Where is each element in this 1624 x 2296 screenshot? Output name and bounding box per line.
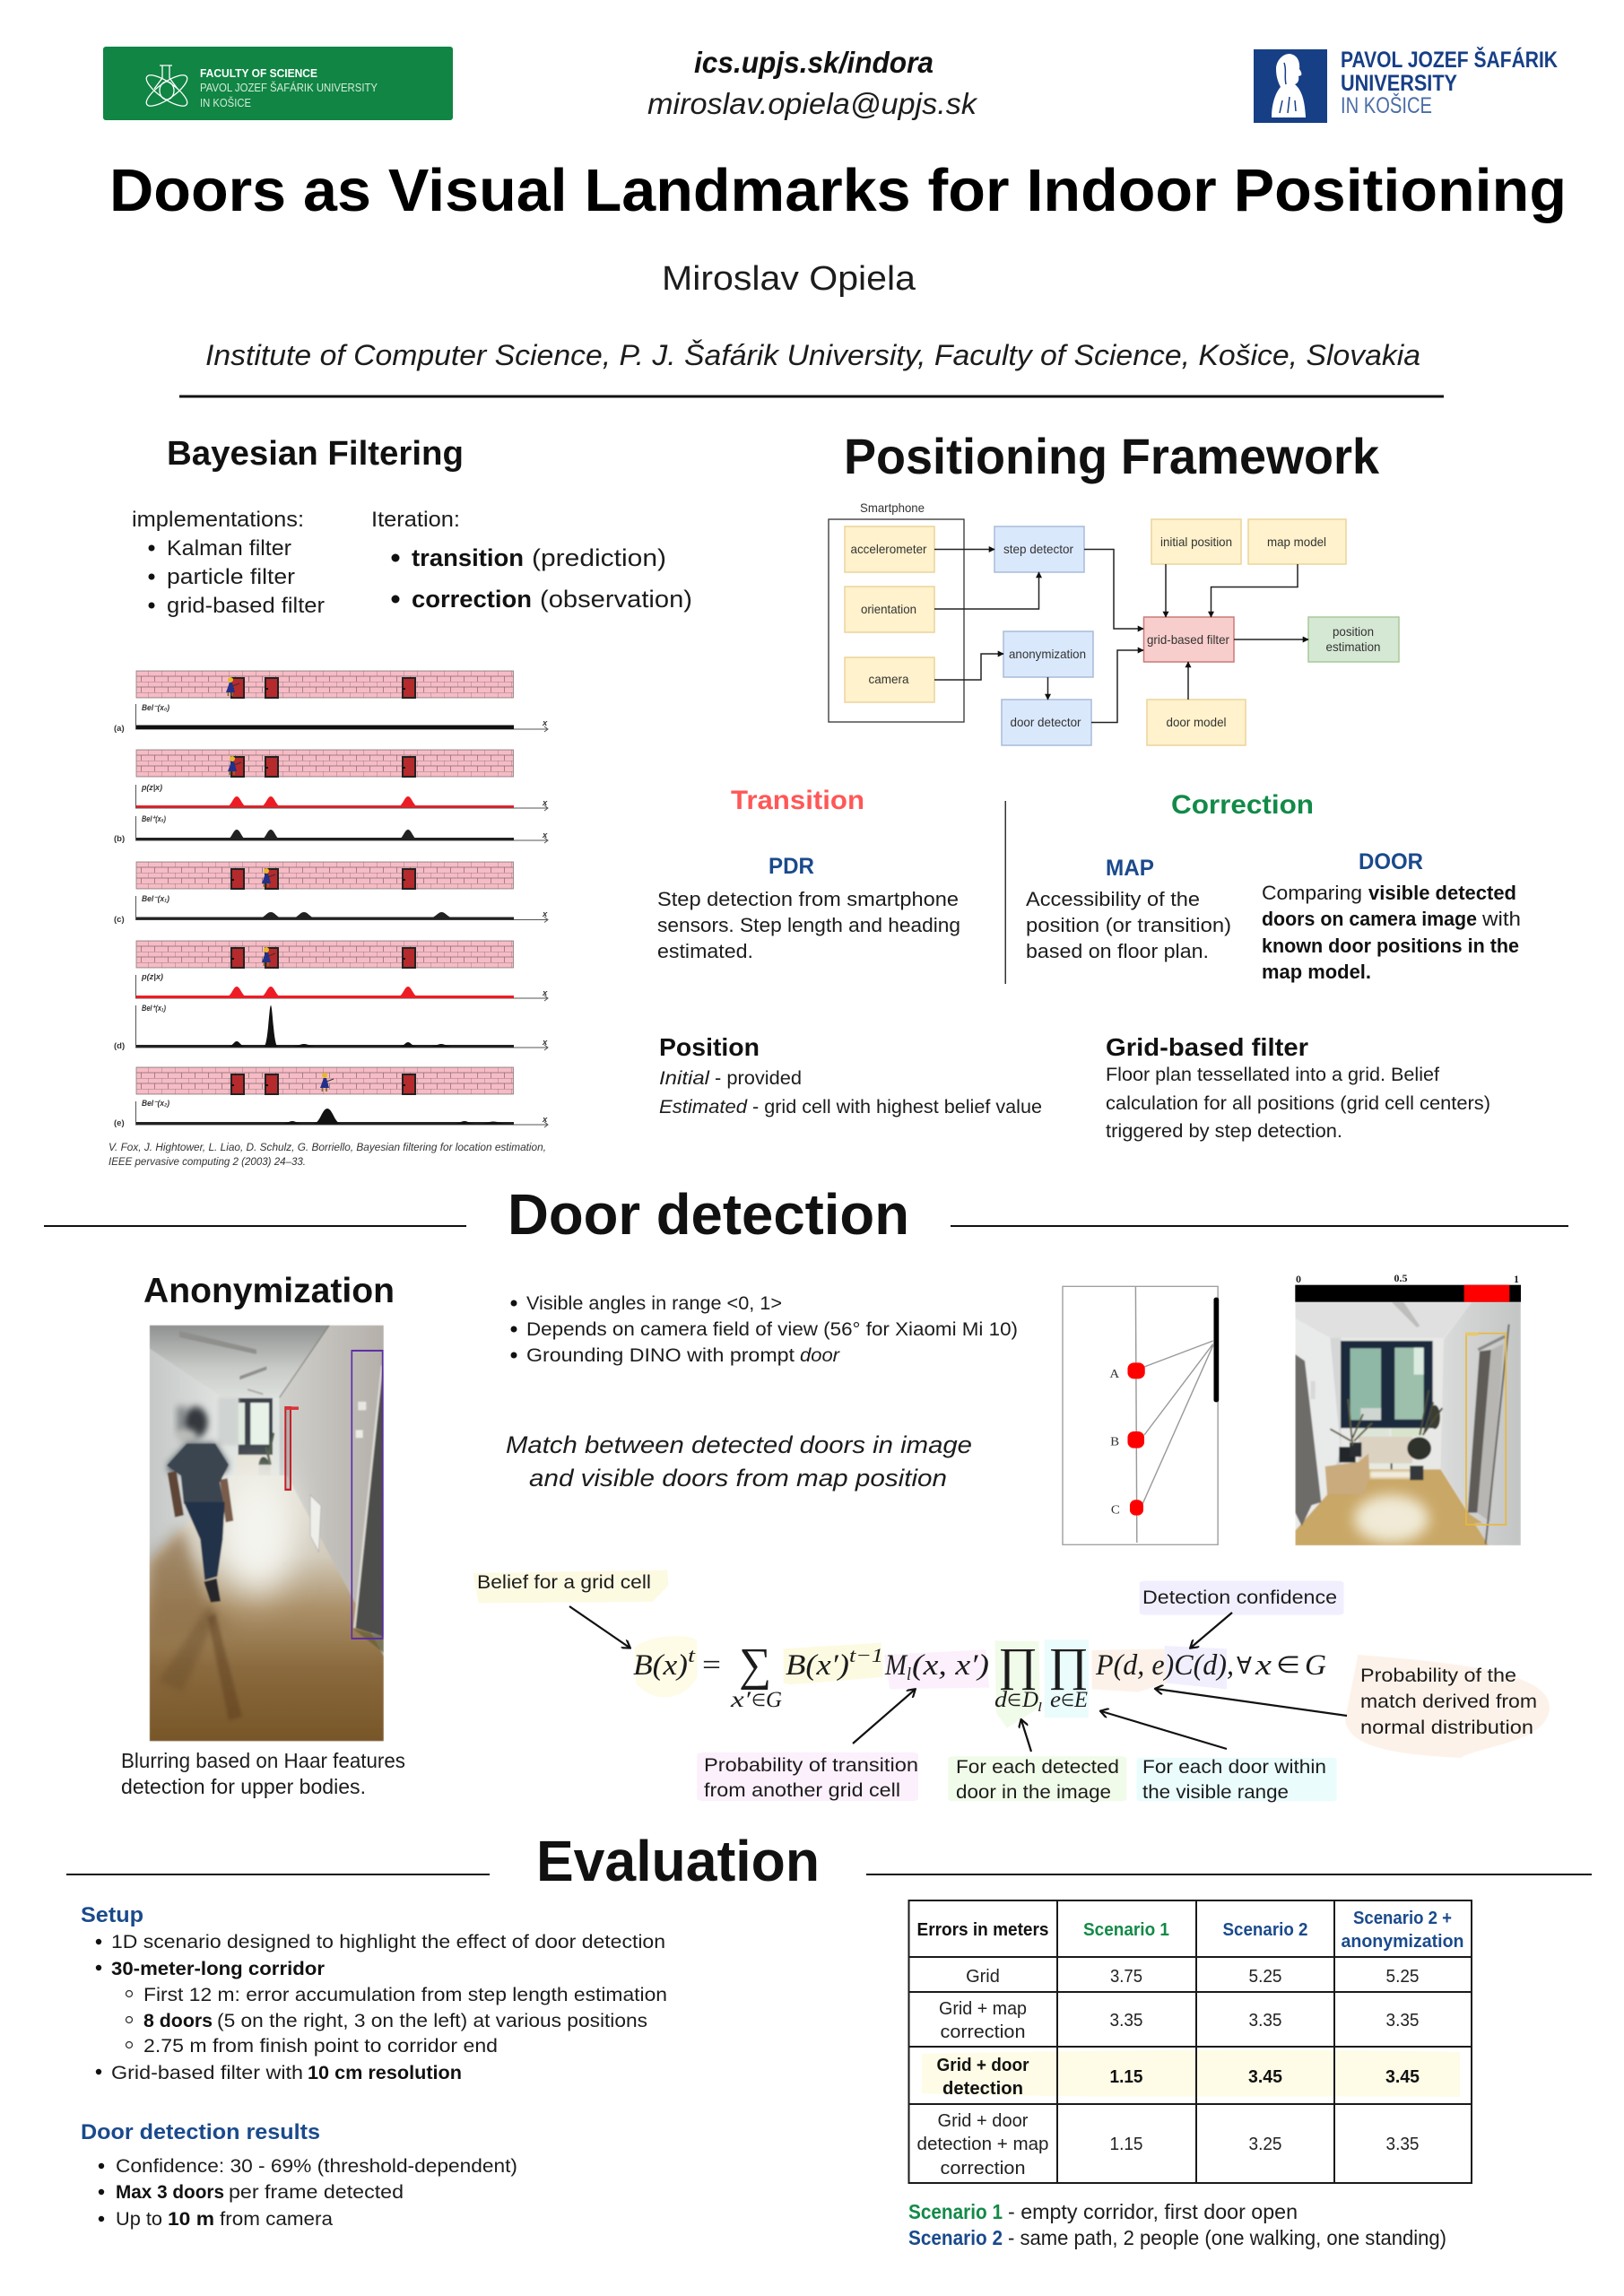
flowchart: system architecture: accelerometer xyxy=(850,542,927,556)
list: door detection notes: Visible angles in range <0, 1> xyxy=(526,1292,782,1314)
citation: V. Fox, J. Hightower, L. Liao, D. Schulz, G. Borriello, Bayesian filtering for location estimation, xyxy=(109,1143,546,1153)
caption: blurring method xyxy=(121,1749,405,1798)
chart: belief update sequence with doors: x xyxy=(542,1115,548,1125)
chart: belief update sequence with doors: x xyxy=(542,988,548,998)
logo: Pavol Jozef Šafárik University xyxy=(1254,46,1558,123)
table: errors in meters: 3.75 xyxy=(1110,1967,1142,1987)
equation xyxy=(633,1639,1326,1715)
legend: scenarios: Scenario 1 xyxy=(908,2200,1003,2223)
logo: Faculty of Science: FACULTY OF SCIENCE xyxy=(200,67,317,80)
photo: corridor with detected door and visibility bar: 0.5 xyxy=(1394,1272,1408,1284)
logo: Faculty of Science: PAVOL JOZEF ŠAFÁRIK UNIVERSITY xyxy=(200,81,378,94)
chart: belief update sequence with doors: Bel⁺(x₀) xyxy=(142,814,166,824)
heading: Position: Position xyxy=(659,1033,760,1061)
annotation: probability of the match: match derived from xyxy=(1360,1691,1537,1712)
table: errors in meters: Grid xyxy=(966,1967,1000,1987)
subheading: DOOR: DOOR xyxy=(1359,849,1423,874)
photo: person walking in corridor with blurred head xyxy=(150,1325,384,1742)
equation: G xyxy=(766,1688,782,1712)
list: iteration: (observation) xyxy=(540,586,692,613)
text: MAP description: position (or transition) xyxy=(1026,914,1231,936)
annotation: probability of the match: Probability of the xyxy=(1360,1665,1516,1686)
table: errors in meters: Scenario 1 xyxy=(1083,1920,1169,1940)
table: errors in meters: 3.45 xyxy=(1248,2067,1282,2087)
panel: positioning framework xyxy=(829,428,1399,745)
panel: setup: (5 on the right, 3 on the left) at various positions xyxy=(217,2010,647,2031)
title: Doors as Visual Landmarks for Indoor Positioning xyxy=(109,157,1567,224)
table: errors in meters: 3.25 xyxy=(1248,2135,1282,2154)
flowchart: system architecture: Smartphone xyxy=(860,500,925,515)
heading: Bayesian Filtering: Bayesian Filtering xyxy=(167,435,464,473)
table: errors in meters: anonymization xyxy=(1342,1932,1463,1952)
panel: grid-based filter: triggered by step detection. xyxy=(1106,1121,1342,1142)
equation: P(d, e)C(d), xyxy=(1095,1649,1234,1682)
annotation: detection confidence: Detection confidence xyxy=(1142,1587,1337,1608)
chart: belief update sequence with doors: (a) xyxy=(114,724,125,734)
citation xyxy=(109,1143,546,1168)
equation: ∈ xyxy=(1061,1692,1074,1710)
chart: belief update sequence with doors: Bel⁻(x₁) xyxy=(142,894,169,904)
photo: corridor with detected door and visibility bar xyxy=(1295,1272,1521,1545)
text: MAP description: Accessibility of the xyxy=(1026,888,1200,910)
table: errors in meters: 5.25 xyxy=(1248,1967,1282,1987)
panel: door detection results xyxy=(81,2120,517,2230)
list: implementations: particle filter xyxy=(167,565,295,589)
flowchart: system architecture: door model xyxy=(1166,715,1227,729)
logo: Faculty of Science: IN KOŠICE xyxy=(200,96,251,109)
legend: scenarios: Scenario 2 xyxy=(908,2226,1003,2249)
equation: = xyxy=(702,1649,721,1682)
legend: scenarios xyxy=(908,2200,1446,2249)
panel: door detection results: Max 3 doors xyxy=(116,2181,224,2203)
heading: Setup: Setup xyxy=(81,1903,143,1927)
flowchart: system architecture xyxy=(829,500,1399,745)
panel: setup: Grid-based filter with xyxy=(111,2062,303,2083)
heading: Grid-based filter: Grid-based filter xyxy=(1106,1033,1308,1061)
panel: position xyxy=(659,1033,1042,1118)
photo: corridor with detected door and visibility bar: 1 xyxy=(1514,1273,1519,1285)
equation: B(x′) xyxy=(786,1649,849,1682)
text: match statement: Match between detected doors in image xyxy=(506,1431,972,1458)
chart: belief update sequence with doors: Bel⁺(x₁) xyxy=(142,1004,166,1013)
panel: setup: 30-meter-long corridor xyxy=(111,1958,326,1979)
formula with annotations xyxy=(473,1570,1550,1803)
web address: ics.upjs.sk/indora xyxy=(694,46,934,79)
flowchart: system architecture: grid-based filter xyxy=(1147,632,1229,647)
annotation: probability of the match: normal distribution xyxy=(1360,1717,1533,1738)
table: errors in meters: 1.15 xyxy=(1110,2135,1142,2154)
logo: Pavol Jozef Šafárik University: UNIVERSITY xyxy=(1341,71,1457,96)
citation: IEEE pervasive computing 2 (2003) 24–33. xyxy=(109,1157,306,1168)
text: MAP description: based on floor plan. xyxy=(1026,940,1209,962)
annotation: belief for a grid cell: Belief for a grid cell xyxy=(477,1571,651,1593)
equation: ∀ xyxy=(1237,1653,1252,1679)
list: door detection notes xyxy=(511,1292,1018,1366)
text: MAP description xyxy=(1026,888,1231,962)
annotation: probability of transition: from another grid cell xyxy=(704,1779,900,1801)
annotation: probability of transition: Probability of transition xyxy=(704,1754,918,1776)
table: errors in meters: Errors in meters xyxy=(916,1920,1049,1940)
panel: position: - provided xyxy=(715,1068,802,1089)
text: match statement xyxy=(506,1431,972,1492)
list: iteration: Iteration: xyxy=(371,508,460,532)
flowchart: system architecture: door detector xyxy=(1010,715,1081,729)
panel: grid-based filter: Floor plan tessellated into a grid. Belief xyxy=(1106,1065,1439,1085)
email: miroslav.opiela@upjs.sk xyxy=(647,87,978,120)
panel: Bayesian filtering xyxy=(109,435,692,1168)
panel: setup: 2.75 m from finish point to corridor end xyxy=(143,2035,498,2057)
flowchart: system architecture: map model xyxy=(1267,535,1326,549)
table: errors in meters: Grid + map xyxy=(939,1999,1027,2019)
flowchart: system architecture: initial position xyxy=(1160,535,1232,549)
panel: door detection results: Up to xyxy=(116,2208,162,2230)
diagram: positions A B C and door on map xyxy=(1063,1286,1219,1544)
chart: belief update sequence with doors: x xyxy=(542,909,548,919)
list: iteration xyxy=(371,508,692,613)
panel: position: - grid cell with highest belief value xyxy=(752,1097,1042,1118)
equation: ∈ xyxy=(1276,1652,1300,1678)
flowchart: system architecture: estimation xyxy=(1325,639,1381,654)
text: DOOR description: visible detected xyxy=(1368,882,1516,904)
heading: Door detection results: Door detection results xyxy=(81,2120,320,2144)
text: DOOR description xyxy=(1262,882,1521,983)
table: errors in meters: Scenario 2 xyxy=(1223,1920,1307,1940)
caption: blurring method: detection for upper bodies. xyxy=(121,1775,366,1798)
chart: belief update sequence with doors: Bel⁻(x₂) xyxy=(142,1099,169,1109)
heading: Anonymization: Anonymization xyxy=(143,1272,395,1310)
panel: position: Estimated xyxy=(659,1097,748,1118)
panel: setup: 8 doors xyxy=(143,2010,213,2031)
legend: scenarios: - empty corridor, first door open xyxy=(1008,2200,1298,2223)
flowchart: system architecture: position xyxy=(1333,624,1374,639)
equation: G xyxy=(1305,1649,1326,1682)
logo: Pavol Jozef Šafárik University: PAVOL JOZEF ŠAFÁRIK xyxy=(1341,46,1558,73)
panel: door detection results: Confidence: 30 - 69% (threshold-dependent) xyxy=(116,2155,517,2177)
text: PDR description xyxy=(657,888,960,962)
subheading: PDR: PDR xyxy=(769,854,814,879)
text: DOOR description: map model. xyxy=(1262,961,1371,983)
equation: (x, x′) xyxy=(912,1649,989,1682)
table: errors in meters: 5.25 xyxy=(1386,1967,1419,1987)
list: iteration: correction xyxy=(412,586,532,613)
list: implementations xyxy=(132,508,325,618)
panel: grid-based filter: calculation for all positions (grid cell centers) xyxy=(1106,1093,1490,1114)
section heading: Evaluation: Evaluation xyxy=(536,1829,820,1893)
chart: belief update sequence with doors: (d) xyxy=(114,1041,125,1051)
panel: door detection results: from camera xyxy=(220,2208,333,2230)
chart: belief update sequence with doors: (c) xyxy=(114,915,125,925)
section heading: Door detection: Door detection xyxy=(508,1182,909,1247)
logo: Pavol Jozef Šafárik University: IN KOŠICE xyxy=(1341,92,1432,118)
panel: setup: 10 cm resolution xyxy=(308,2062,462,2083)
subheading: MAP: MAP xyxy=(1106,856,1154,881)
equation: B(x) xyxy=(633,1649,688,1682)
table: errors in meters: Grid + door xyxy=(938,2111,1029,2131)
heading: Correction: Correction xyxy=(1171,790,1314,820)
equation: l xyxy=(1038,1700,1042,1715)
table: errors in meters: detection + map xyxy=(916,2135,1049,2154)
icon: flask and atom xyxy=(143,65,191,111)
chart: belief update sequence with doors: p(z|x) xyxy=(141,972,163,982)
equation: ∑ xyxy=(739,1639,771,1691)
chart: belief update sequence with doors: x xyxy=(542,798,548,808)
table: errors in meters: 3.35 xyxy=(1386,2011,1419,2031)
chart: belief update sequence with doors: p(z|x) xyxy=(141,783,162,793)
diagram: positions A B C and door on map: B xyxy=(1110,1435,1119,1448)
text: PDR description: estimated. xyxy=(657,940,753,962)
table: errors in meters: Scenario 2 + xyxy=(1353,1909,1452,1928)
list: implementations: grid-based filter xyxy=(167,594,325,618)
diagram: positions A B C and door on map: A xyxy=(1109,1367,1120,1381)
annotation: for each detected door: For each detected xyxy=(956,1756,1119,1778)
table: errors in meters: 3.35 xyxy=(1386,2135,1419,2154)
annotation: for each door within visible range: For each door within xyxy=(1142,1756,1326,1778)
annotation: for each detected door xyxy=(956,1720,1119,1803)
legend: scenarios: - same path, 2 people (one walking, one standing) xyxy=(1008,2226,1446,2249)
panel: setup xyxy=(81,1903,667,2083)
table: errors in meters: correction xyxy=(940,2159,1026,2179)
logo: Faculty of Science xyxy=(103,47,453,120)
panel: correction xyxy=(1026,790,1521,983)
table: errors in meters: 3.35 xyxy=(1110,2011,1142,2031)
equation: e xyxy=(1050,1688,1061,1712)
equation: d xyxy=(994,1688,1008,1712)
list: door detection notes: Depends on camera field of view (56° for Xiaomi Mi 10) xyxy=(526,1318,1018,1340)
flowchart: system architecture: step detector xyxy=(1003,542,1073,556)
equation: x xyxy=(1255,1649,1272,1682)
list: implementations: implementations: xyxy=(132,508,304,532)
table: errors in meters xyxy=(908,1900,1472,2183)
heading: Positioning Framework: Positioning Framework xyxy=(844,428,1380,484)
highlights behind formula terms xyxy=(473,1570,1550,1801)
list: iteration: transition xyxy=(412,544,524,571)
equation: t−1 xyxy=(849,1644,883,1666)
flowchart: system architecture: anonymization xyxy=(1009,647,1086,661)
equation: x′ xyxy=(730,1688,751,1712)
table: errors in meters: 3.35 xyxy=(1248,2011,1282,2031)
table: errors in meters: correction xyxy=(940,2022,1026,2042)
annotation: for each door within visible range xyxy=(1101,1711,1326,1803)
diagram: positions A B C and door on map: C xyxy=(1111,1503,1120,1517)
annotation: probability of the match xyxy=(1156,1665,1537,1738)
equation: ∏ xyxy=(1048,1639,1089,1691)
annotation: for each detected door: door in the image xyxy=(956,1781,1111,1803)
equation: ∈ xyxy=(1007,1692,1021,1710)
text: match statement: and visible doors from map position xyxy=(529,1465,947,1492)
caption: blurring method: Blurring based on Haar features xyxy=(121,1749,405,1772)
photo: corridor with detected door and visibility bar: 0 xyxy=(1296,1273,1301,1285)
list: door detection notes: door xyxy=(800,1344,840,1366)
text: PDR description: sensors. Step length and heading xyxy=(657,914,960,936)
equation: ∏ xyxy=(998,1639,1038,1691)
panel: grid-based filter xyxy=(1106,1033,1490,1142)
equation: l xyxy=(907,1665,911,1684)
author: Miroslav Opiela xyxy=(662,260,916,298)
equation: ∈ xyxy=(751,1692,766,1710)
text: PDR description: Step detection from smartphone xyxy=(657,888,959,910)
equation: t xyxy=(688,1644,696,1666)
chart: belief update sequence with doors: (e) xyxy=(114,1118,125,1128)
equation: M xyxy=(884,1649,908,1682)
text: DOOR description: known door positions in the xyxy=(1262,935,1519,957)
table: errors in meters: Grid + door xyxy=(936,2056,1029,2075)
panel: setup: 1D scenario designed to highlight the effect of door detection xyxy=(111,1931,665,1952)
chart: belief update sequence with doors xyxy=(114,671,548,1128)
equation: D xyxy=(1021,1688,1038,1712)
annotation: belief for a grid cell xyxy=(477,1571,651,1648)
text: DOOR description: with xyxy=(1481,908,1521,930)
annotation: probability of transition xyxy=(704,1690,918,1801)
list: implementations: Kalman filter xyxy=(167,536,291,561)
flowchart: system architecture: orientation xyxy=(861,602,916,616)
list: iteration: (prediction) xyxy=(532,544,666,571)
table: errors in meters: 1.15 xyxy=(1110,2067,1142,2087)
affiliation: Institute of Computer Science, P. J. Šafárik University, Faculty of Science, Košice, Slovakia xyxy=(205,339,1420,371)
chart: belief update sequence with doors: x xyxy=(542,1038,548,1048)
panel: door detection results: per frame detected xyxy=(229,2181,404,2203)
text: DOOR description: Comparing xyxy=(1262,882,1362,904)
annotation: detection confidence xyxy=(1142,1587,1337,1648)
header band xyxy=(103,46,1558,123)
panel: anonymization xyxy=(121,1272,405,1798)
table: errors in meters: 3.45 xyxy=(1385,2067,1420,2087)
panel: transition xyxy=(657,786,960,962)
list: door detection notes: Grounding DINO with prompt xyxy=(526,1344,795,1366)
chart: belief update sequence with doors: Bel⁻(x₀) xyxy=(142,703,169,713)
chart: belief update sequence with doors: (b) xyxy=(114,834,125,844)
table: errors in meters: detection xyxy=(942,2079,1023,2099)
chart: belief update sequence with doors: x xyxy=(542,718,548,728)
heading: Transition: Transition xyxy=(731,786,864,815)
flowchart: system architecture: camera xyxy=(868,672,909,686)
equation: E xyxy=(1073,1688,1088,1712)
text: DOOR description: doors on camera image xyxy=(1262,908,1477,930)
annotation: for each door within visible range: the visible range xyxy=(1142,1781,1289,1803)
panel: setup: First 12 m: error accumulation from step length estimation xyxy=(143,1984,667,2005)
panel: position: Initial xyxy=(659,1068,711,1089)
chart: belief update sequence with doors: x xyxy=(542,831,548,840)
panel: door detection results: 10 m xyxy=(168,2208,214,2230)
